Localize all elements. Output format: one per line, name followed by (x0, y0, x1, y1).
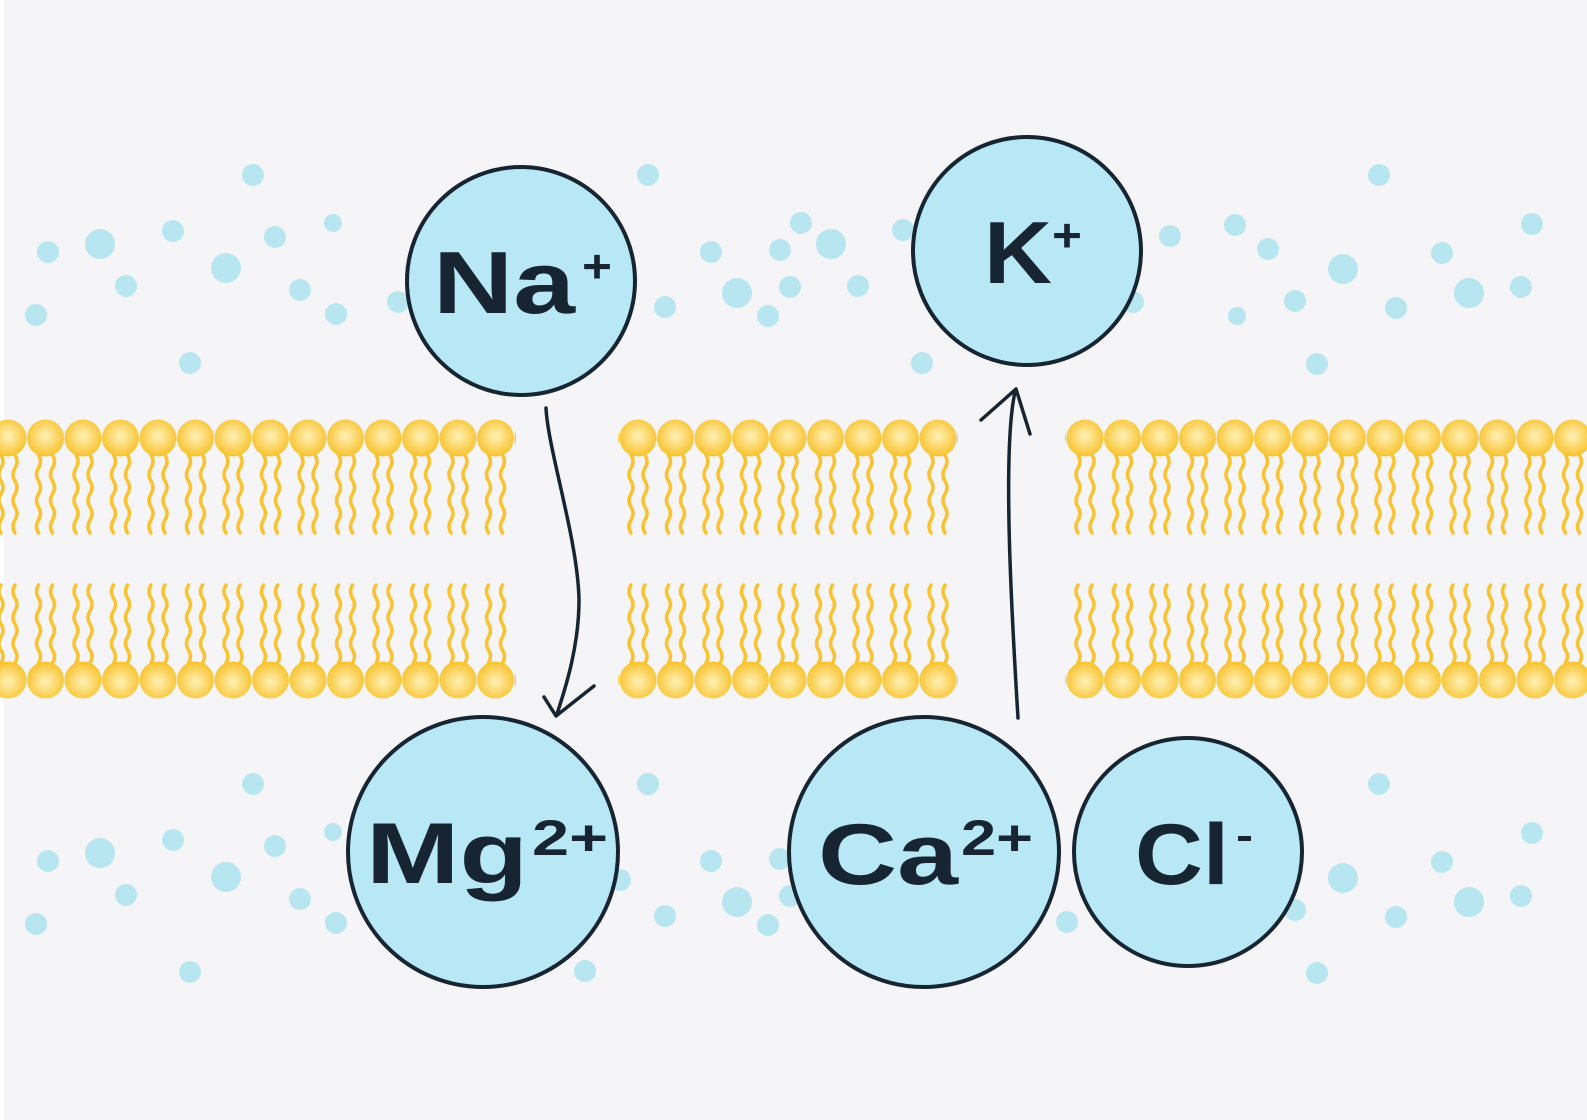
ion: Cl-: Cl (1135, 807, 1229, 903)
ion: Ca2+ (789, 717, 1059, 987)
ion: K+: K (984, 203, 1052, 302)
ion: Mg2+: 2+ (532, 810, 608, 866)
particles top (25, 164, 1543, 375)
arrow: Ca2+ outward to K+ (981, 389, 1030, 718)
ion: Mg2+ (348, 717, 618, 987)
ion: Ca2+: Ca (818, 807, 959, 903)
ion: Mg2+: Mg (366, 806, 528, 902)
ion: Na+: Na (433, 233, 576, 332)
membrane: lipid bilayer (0, 415, 1587, 703)
ion: Cl- (1074, 738, 1302, 966)
ion: K+ (913, 137, 1141, 365)
ion: Na+ (407, 167, 635, 395)
ion: Ca2+: 2+ (961, 810, 1033, 866)
ion: Na+: + (582, 240, 612, 292)
particles bottom (25, 773, 1543, 984)
arrow: Na+ inward (544, 408, 594, 716)
ion: K+: + (1052, 209, 1082, 261)
